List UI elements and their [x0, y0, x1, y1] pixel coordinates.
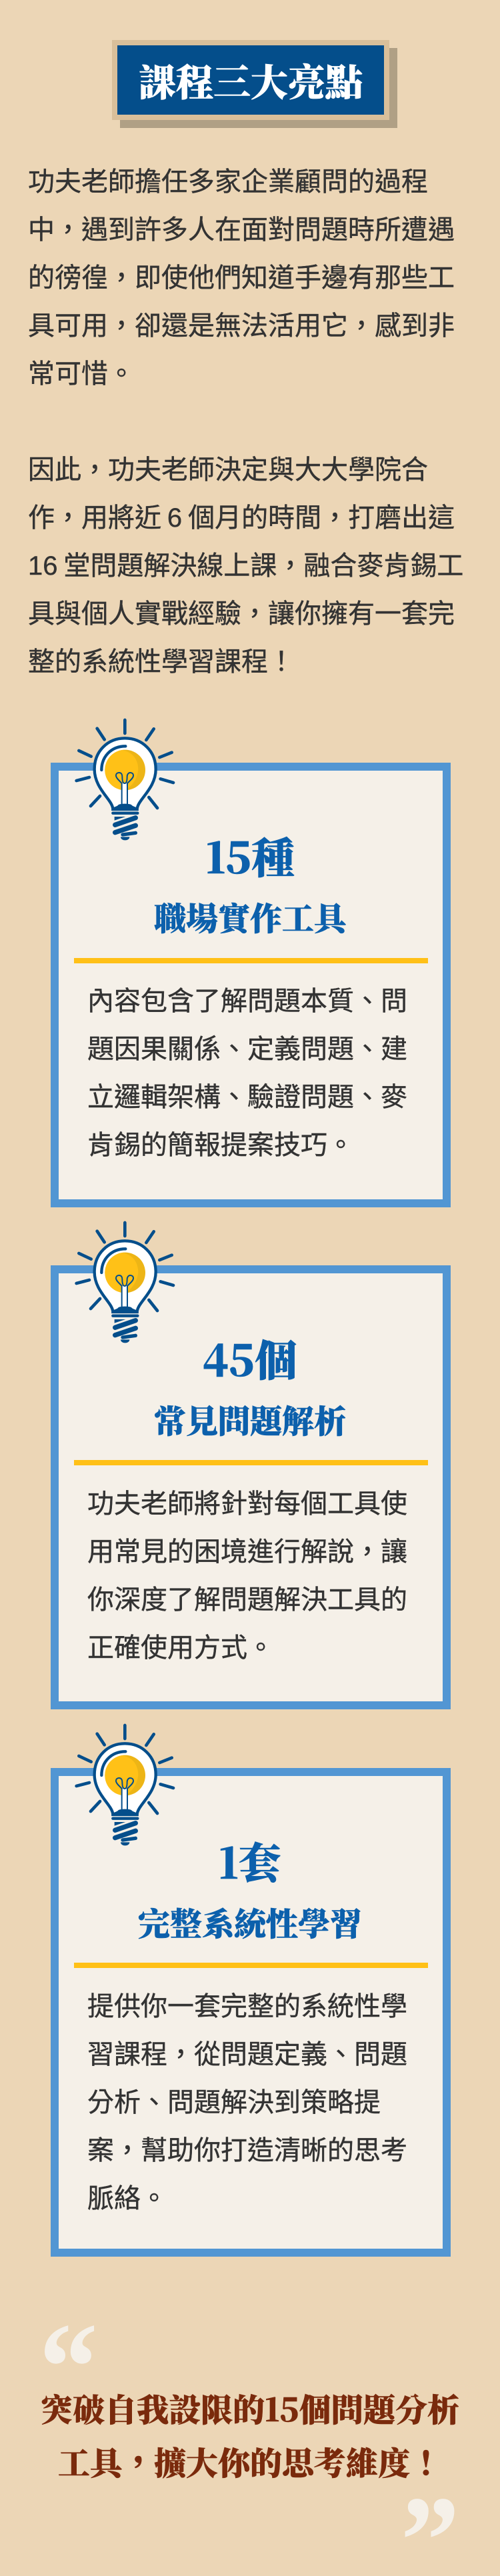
card 3 number heading: 1套 [219, 1830, 281, 1891]
panel: card 1 [51, 719, 451, 1207]
card 3 subheading: 完整系統性學習 [138, 1899, 362, 1945]
banner shadow [120, 48, 397, 128]
card 1 body text: 題因果關係、定義問題、建 [87, 1035, 407, 1064]
panel: card 2 [51, 1221, 451, 1709]
card 3 body text: 提供你一套完整的系統性學 [87, 1992, 407, 2021]
card 3 body text: 分析、問題解決到策略提 [87, 2088, 381, 2117]
banner frame [112, 40, 389, 120]
card 1 body text: 內容包含了解問題本質、問 [87, 987, 407, 1016]
title banner [112, 40, 397, 128]
intro paragraph 1: 常可惜。 [28, 359, 135, 389]
intro paragraph 2: 16 堂問題解決線上課，融合麥肯錫工 [28, 551, 463, 581]
card 3 body text: 習課程，從問題定義、問題 [87, 2040, 407, 2069]
intro paragraph 1 [28, 167, 455, 389]
intro paragraph 1: 功夫老師擔任多家企業顧問的過程 [28, 167, 428, 197]
card 2 body text [87, 1489, 407, 1663]
card 1 body text [87, 987, 407, 1160]
card 3 frame [51, 1768, 451, 2257]
intro paragraph 1: 中，遇到許多人在面對問題時所遭遇 [28, 215, 455, 245]
icon: light bulb [75, 719, 175, 840]
card 3 body text [87, 1992, 407, 2213]
card 3 yellow rule [74, 1963, 428, 1968]
card 1 frame [51, 763, 451, 1207]
quote text: 突破自我設限的15個問題分析 [41, 2385, 459, 2431]
card 2 body text: 用常見的困境進行解說，讓 [87, 1537, 407, 1567]
card 2 number heading: 45個 [203, 1327, 297, 1389]
panel: card 3 [51, 1724, 451, 2257]
card 2 body text: 正確使用方式。 [87, 1633, 274, 1663]
card 1 body text: 立邏輯架構、驗證問題、麥 [87, 1083, 407, 1112]
card 2 yellow rule [74, 1460, 428, 1465]
card 2 frame [51, 1265, 451, 1709]
quote text: 工具，擴大你的思考維度！ [58, 2438, 442, 2484]
intro paragraph 1: 的徬徨，即使他們知道手邊有那些工 [28, 263, 455, 293]
card 2 subheading: 常見問題解析 [154, 1396, 346, 1442]
card 1 number heading: 15種 [206, 825, 294, 886]
card 1 subheading: 職場實作工具 [154, 893, 346, 939]
intro paragraph 2: 具與個人實戰經驗，讓你擁有一套完 [28, 599, 455, 629]
intro paragraph 2: 整的系統性學習課程！ [28, 647, 295, 677]
card 1 yellow rule [74, 958, 428, 963]
intro paragraph 2 [28, 455, 463, 677]
intro paragraph 2: 因此，功夫老師決定與大大學院合 [28, 455, 428, 485]
intro paragraph 1: 具可用，卻還是無法活用它，感到非 [28, 311, 455, 341]
card 3 body text: 案，幫助你打造清晰的思考 [87, 2136, 407, 2165]
intro paragraph 2: 作，用將近 6 個月的時間，打磨出這 [28, 503, 455, 533]
card 3 body text: 脈絡。 [87, 2184, 167, 2213]
banner title text: 課程三大亮點 [139, 54, 363, 107]
card 2 body text: 功夫老師將針對每個工具使 [87, 1489, 407, 1519]
card 1 body text: 肯錫的簡報提案技巧。 [87, 1131, 354, 1160]
icon: light bulb [75, 1221, 175, 1343]
card 2 body text: 你深度了解問題解決工具的 [87, 1585, 407, 1615]
icon: light bulb [75, 1724, 175, 1845]
quote text [41, 2385, 459, 2484]
